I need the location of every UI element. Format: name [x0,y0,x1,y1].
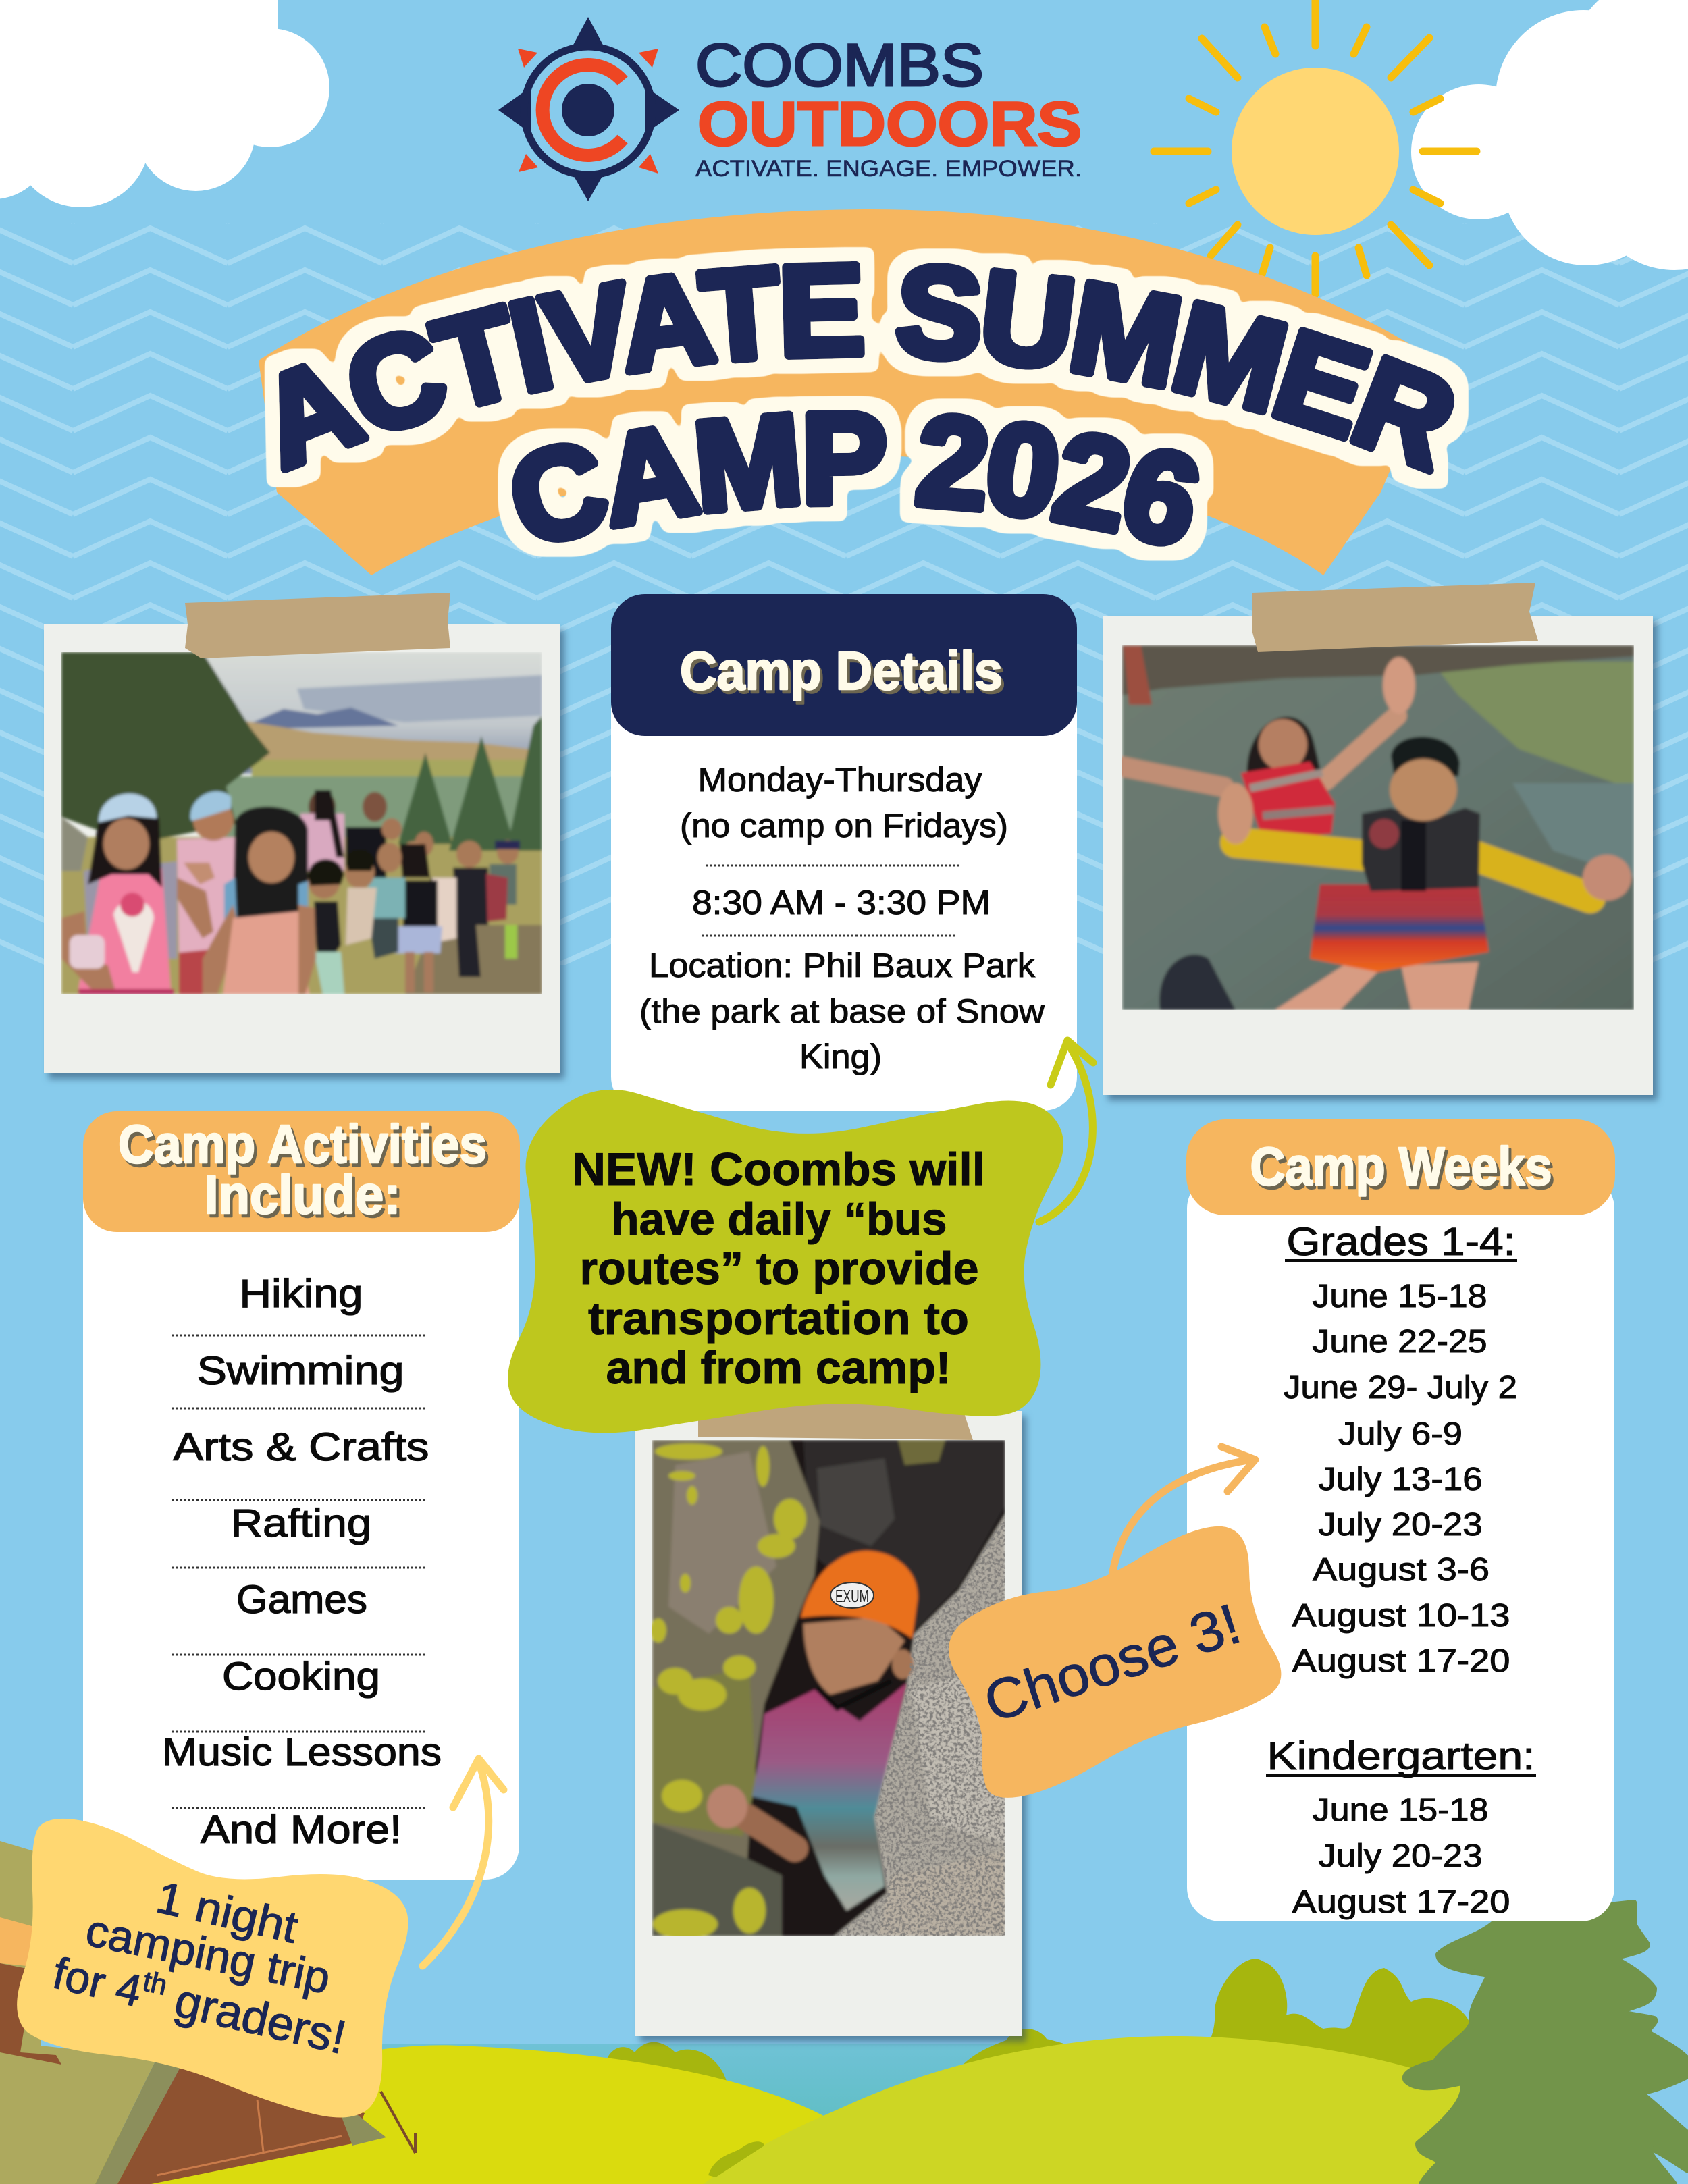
callout: bus routes [508,1090,1063,1433]
list: kindergarten weeks: Kindergarten: [1267,1734,1535,1778]
heading: Camp Details: Camp Details [680,641,1003,701]
heading: Camp Activities Include [118,1114,487,1225]
blob shape [17,1819,408,2118]
logo text: tagline: ACTIVATE. ENGAGE. EMPOWER. [695,156,1082,182]
callout text: for 4 [49,1948,147,2016]
adult 1 [307,793,337,815]
girl [1325,716,1397,780]
list: kindergarten weeks: July 20-23 [1318,1838,1483,1874]
arrow: green, bus routes to details [1039,1040,1093,1222]
text: location: Location: Phil Baux Park [649,947,1036,984]
callout text: have daily “bus [612,1194,947,1245]
panel header [611,594,1077,736]
text: hours: 8:30 AM - 3:30 PM [692,884,991,922]
list: grades 1-4 weeks: July 20-23 [1318,1507,1483,1543]
photo frame [44,624,560,1073]
zigzag pattern background [0,223,1688,965]
list: activities [162,1272,442,1852]
panel body [83,1148,519,1880]
list: kindergarten weeks: June 15-18 [1313,1792,1488,1828]
panel: camp activities [83,1111,520,1880]
list: grades 1-4 weeks: June 15-18 [1313,1279,1487,1314]
callout text: 1 night [152,1871,302,1952]
kid 3 [233,807,308,918]
small kids [381,818,402,840]
photo frame [635,1411,1022,2036]
photo: kid in orange helmet [650,1440,1005,1939]
tape [1252,583,1538,652]
photo frame [1103,616,1653,1095]
helmet badge: EXUM [835,1586,869,1606]
text: days: (no camp on Fridays) [680,807,1008,845]
photo: kids on a hillside [61,652,542,994]
panel: camp details [611,594,1077,1111]
list: grades 1-4 weeks: June 29- July 2 [1284,1370,1517,1406]
callout text: camping trip [82,1905,335,2003]
heading: Camp Weeks: Camp Weeks [1250,1136,1552,1196]
kid 2 [177,837,240,959]
logo: Coombs Outdoors [498,17,1082,201]
list: grades 1-4 weeks: August 17-20 [1292,1643,1510,1679]
panel header [83,1111,520,1232]
list: grades 1-4 weeks: August 10-13 [1292,1598,1510,1634]
photo card: group hike [44,593,560,1073]
helmet badge [830,1582,874,1608]
list: activities: Arts & Crafts [173,1425,429,1469]
tape [698,1397,973,1440]
bushes [604,1959,1471,2093]
landscape: lake, bushes and hills [20,1959,1566,2184]
callout: camping trip [17,1759,504,2118]
panel body [1187,1175,1614,1921]
list: kindergarten weeks: August 17-20 [1292,1884,1510,1920]
list: grades 1-4 weeks [1284,1220,1517,1679]
panel header [1186,1119,1615,1215]
callout text: and from camp! [606,1342,951,1393]
callout text: graders! [170,1973,351,2064]
text: location: (the park at base of Snow [639,992,1045,1030]
callout text: NEW! Coombs will [572,1144,985,1195]
blob shape [949,1526,1281,1798]
illustration: tent [0,1841,415,2184]
photo card: swimming [1103,583,1653,1095]
list: activities: Rafting [231,1501,371,1545]
title: Activate Summer Camp 2026: CAMP 2026 [497,396,1214,562]
logo text: OUTDOORS: OUTDOORS [697,90,1082,159]
title: Activate Summer Camp 2026: ACTIVATE SUMMER [264,247,1469,489]
kid 1 [84,861,177,959]
callout text: th [140,1965,170,2001]
heading: Camp Activities Include: Camp Activities [118,1114,487,1174]
list: grades 1-4 weeks: August 3-6 [1313,1552,1489,1588]
photo: two kids floating in a lake [1122,645,1634,1010]
callout text: transportation to [588,1293,969,1344]
rock speckle [835,1514,1005,1936]
panel body [611,675,1077,1111]
text: days: Monday-Thursday [698,761,982,799]
panel: camp weeks [1186,1119,1615,1921]
icon: pine tree [1405,1902,1688,2184]
icon: left cloud [0,0,329,207]
callout text: routes” to provide [579,1243,979,1294]
tape [185,593,450,658]
title banner ribbon [259,209,1437,575]
list: grades 1-4 weeks: June 22-25 [1313,1324,1487,1360]
left hill [20,2045,999,2184]
blob shape [508,1090,1063,1433]
callout text: Choose 3! [976,1591,1248,1734]
right hill [704,2036,1566,2184]
boy [1236,843,1371,856]
lake [378,2044,1080,2184]
callout text [49,1871,351,2064]
heading: Camp Activities Include: Include: [204,1165,401,1225]
icon: sun [1154,0,1477,294]
logo text: COOMBS: COOMBS [695,31,984,99]
list: activities: And More! [201,1808,402,1852]
icon: right cloud [1411,0,1688,270]
list: activities: Hiking [239,1272,363,1316]
callout: choose 3 [949,1447,1281,1798]
list: grades 1-4 weeks: Grades 1-4: [1287,1220,1515,1264]
callout text [572,1144,985,1393]
list: grades 1-4 weeks: July 13-16 [1318,1462,1483,1497]
arrow: orange, choose 3 to weeks [1113,1447,1255,1572]
list: activities: Cooking [222,1655,380,1699]
text: location: King) [799,1038,882,1075]
list: activities: Games [236,1578,367,1622]
list: activities: Swimming [197,1349,404,1393]
list: activities: Music Lessons [162,1730,442,1774]
text: location [639,947,1045,1075]
arrow: yellow, camping trip to activities [423,1759,504,1966]
list: kindergarten weeks [1266,1734,1536,1920]
list: grades 1-4 weeks: July 6-9 [1338,1416,1462,1452]
icon: compass mark [498,17,679,201]
photo card: kid climbing rocks [635,1397,1022,2036]
text: days [680,761,1008,845]
small bush [708,2141,764,2177]
